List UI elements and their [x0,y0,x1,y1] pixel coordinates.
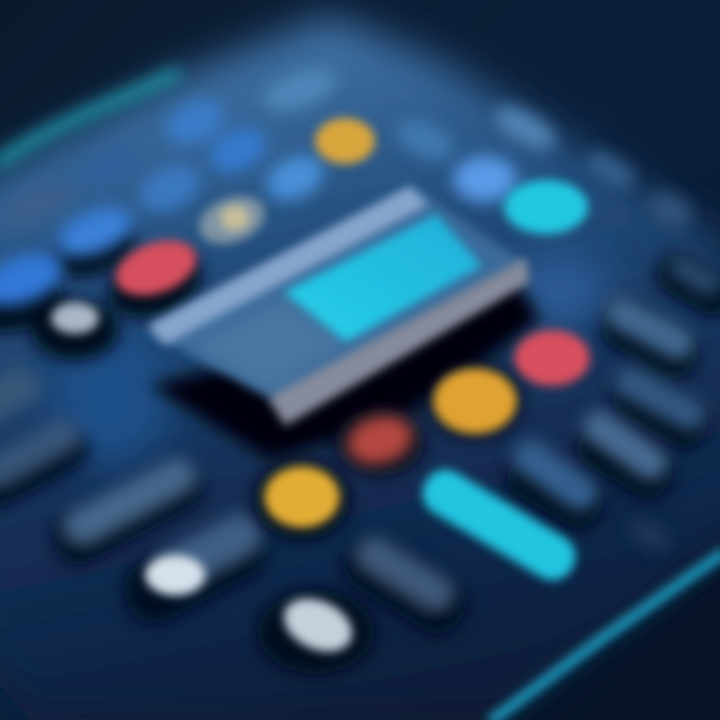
key shadows: all dark keys [0,217,720,536]
key: blue right [453,156,517,202]
key: red right [514,330,590,386]
key: white bottom [258,588,374,674]
device light strip [148,186,428,345]
key: multicolor [193,188,271,252]
key: yellow top [315,118,375,164]
key: yellow lower [254,460,350,540]
device bottom edge [268,258,530,426]
keys: lower left dark [0,360,211,573]
central device [148,186,530,426]
keys: right dark column [505,147,720,556]
key: white highlight lower left [145,555,205,595]
blue glow: left of device [50,325,170,465]
key: red left [108,230,204,306]
blue glow: right of device [510,250,610,330]
teal edge line: bottom right [490,552,720,720]
key: dark lower centre [335,527,475,643]
device cyan screen [284,214,482,342]
key: yellow centre [429,364,521,438]
keys: top blue row [0,61,562,316]
device shadow [150,270,540,460]
key: white left [51,302,99,334]
key: red centre [336,408,424,476]
key: cyan right [504,180,588,234]
device screen left [190,298,345,392]
teal edge line: top left [0,72,180,165]
key: white lower left [114,507,276,633]
key: cyan pill [414,462,584,588]
device top plate [148,188,528,405]
